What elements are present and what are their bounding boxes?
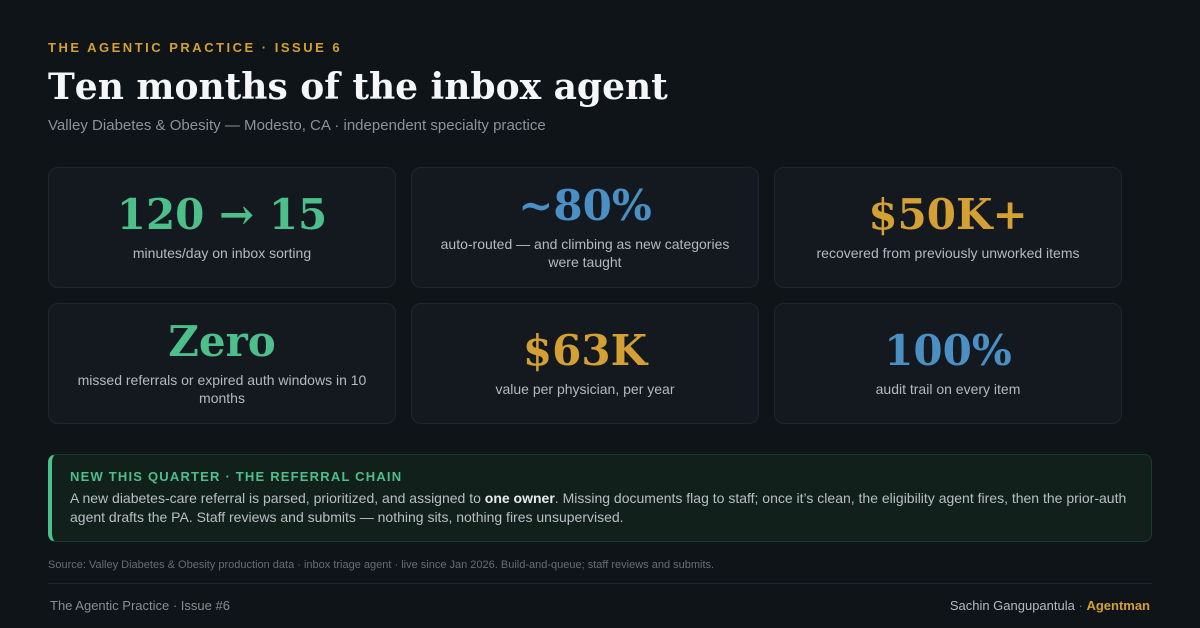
panel: stat 120 to 15 xyxy=(48,167,396,288)
callout: referral chain xyxy=(48,454,1152,542)
source note: Source: Valley Diabetes & Obesity production data · inbox triage agent · live since Jan 2026. Build-and-queue; staff reviews and submits. xyxy=(48,559,714,571)
stat label: value per physician, per year xyxy=(496,381,674,397)
stat label: recovered from previously unworked items xyxy=(816,245,1080,261)
panel: stat zero xyxy=(48,303,396,424)
callout heading: NEW THIS QUARTER · THE REFERRAL CHAIN xyxy=(70,469,402,484)
stat value: Zero xyxy=(168,317,276,366)
stat label: minutes/day on inbox sorting xyxy=(133,245,311,261)
eyebrow: THE AGENTIC PRACTICE · ISSUE 6 xyxy=(48,40,342,55)
stat value: 100% xyxy=(884,326,1012,375)
stat label: missed referrals or expired auth windows in 10 months xyxy=(78,372,366,406)
callout body: A new diabetes-care referral is parsed, prioritized, and assigned to one owner. Missing documents flag to staff; once it’s clean, the eligibility agent fires, then the prior-auth agent drafts the PA. Staff reviews and submits — nothing sits, nothing fires unsupervised. xyxy=(70,490,1126,525)
stat value: $50K+ xyxy=(868,190,1028,239)
stat label: auto-routed — and climbing as new categories were taught xyxy=(441,236,729,270)
stat label: audit trail on every item xyxy=(876,381,1020,397)
panel: stat 80 percent xyxy=(411,167,759,288)
stat value: ~80% xyxy=(518,181,652,230)
footer right: Sachin Gangupantula · Agentman xyxy=(950,598,1150,613)
footer left: The Agentic Practice · Issue #6 xyxy=(50,598,230,613)
subtitle: Valley Diabetes & Obesity — Modesto, CA · independent specialty practice xyxy=(48,117,546,134)
stat value: 120 → 15 xyxy=(117,190,327,239)
title: Ten months of the inbox agent xyxy=(48,66,668,108)
panel: stat 63K xyxy=(411,303,759,424)
panel: stat 50K xyxy=(774,167,1122,288)
stat value: $63K xyxy=(523,326,647,375)
panel: stat 100 percent xyxy=(774,303,1122,424)
